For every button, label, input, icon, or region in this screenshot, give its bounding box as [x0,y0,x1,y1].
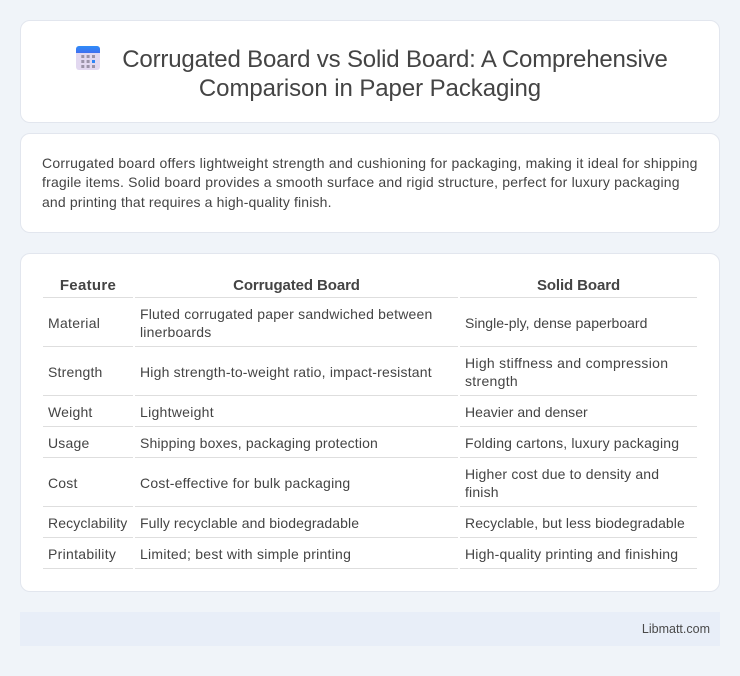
comparison table: finish [465,484,499,500]
comparison table: High strength-to-weight ratio, impact-resistant [140,364,432,380]
row: Recyclability: Recyclability [48,515,127,531]
comparison table: Limited; best with simple printing [140,546,351,562]
intro text [42,155,698,210]
intro text: and printing that requires a high-quality finish. [42,194,332,210]
intro text: Corrugated board offers lightweight strength and cushioning for packaging, making it ideal for shipping [42,155,698,171]
row: Weight: Weight [48,404,93,420]
header card [20,20,720,123]
header: Solid Board: Solid Board [537,277,620,294]
row: Cost: Cost [48,475,78,491]
comparison table: Single-ply, dense paperboard [465,315,647,331]
intro card [20,133,720,233]
comparison table panel [20,253,720,592]
intro text: fragile items. Solid board provides a smooth surface and rigid structure, perfect for luxury packaging [42,174,680,190]
footer text: Libmatt.com [642,622,710,636]
comparison table: Lightweight [140,404,214,420]
comparison table: Cost-effective for bulk packaging [140,475,350,491]
title: Comparison in Paper Packaging [199,75,541,102]
comparison table: Recyclable, but less biodegradable [465,515,685,531]
row: Material: Material [48,315,100,331]
comparison table: Fluted corrugated paper sandwiched between [140,306,432,322]
row: Usage: Usage [48,435,89,451]
comparison table: Heavier and denser [465,404,588,420]
comparison table: Shipping boxes, packaging protection [140,435,378,451]
comparison table [43,277,697,569]
comparison table: linerboards [140,324,211,340]
comparison table: Folding cartons, luxury packaging [465,435,679,451]
comparison table: High stiffness and compression [465,355,668,371]
row: Printability: Printability [48,546,116,562]
comparison table: High-quality printing and finishing [465,546,678,562]
header: Feature: Feature [60,277,116,294]
comparison table: Fully recyclable and biodegradable [140,515,359,531]
footer bar [20,612,720,646]
row: Strength: Strength [48,364,103,380]
title: Corrugated Board vs Solid Board: A Comprehensive [122,46,668,73]
comparison table: strength [465,373,518,389]
icon: calendar [76,46,100,70]
header: Corrugated Board: Corrugated Board [233,277,360,294]
comparison table: Higher cost due to density and [465,466,659,482]
title [122,46,668,102]
